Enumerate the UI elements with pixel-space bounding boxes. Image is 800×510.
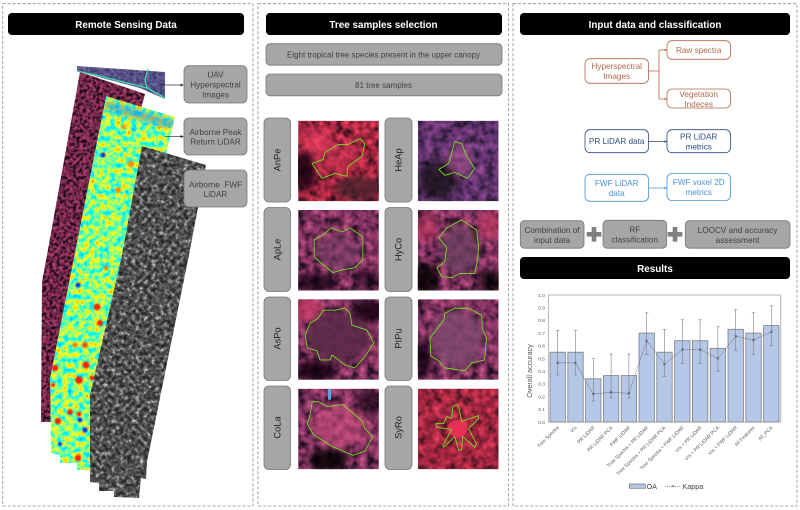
label: airborne peak return LiDAR: Return LiDAR — [190, 138, 241, 147]
species PtPu: PtPu — [394, 328, 404, 349]
text box: eight species — [266, 44, 502, 65]
heading: results — [520, 257, 790, 279]
box: combination of input data — [520, 221, 584, 248]
image: airborne hyperspectral strip — [41, 72, 145, 422]
box: combination of input data: input data — [534, 236, 570, 245]
flow: hyperspectral: Hyperspectral — [591, 62, 642, 71]
species AnPe: AnPe — [272, 149, 282, 171]
flow: hyperspectral: Images — [603, 72, 630, 81]
panel: remote sensing data — [3, 4, 253, 506]
species AnPe — [264, 118, 382, 202]
image: UAV hyperspectral strip — [77, 66, 165, 99]
box: RF classification: RF — [629, 226, 640, 234]
y axis labels: 0.5 — [538, 356, 545, 362]
box: RF classification — [603, 220, 667, 248]
flow: FWF LiDAR: FWF voxel 2D — [673, 178, 725, 187]
label: airborne peak return LiDAR — [184, 118, 247, 155]
arrow: UAV — [164, 84, 184, 86]
species SyRo: SyRo — [394, 416, 404, 439]
y axis labels: 0.3 — [538, 382, 545, 388]
box: combination of input data: Combination of — [524, 226, 580, 235]
flow: hyperspectral — [585, 41, 730, 109]
flow: FWF LiDAR: metrics — [686, 188, 712, 197]
x axis labels: Tree Spectra — [536, 425, 561, 449]
box: RF classification: classification — [612, 236, 658, 244]
line: kappa — [556, 331, 772, 395]
flow: PR LiDAR: PR LiDAR — [680, 132, 717, 142]
error bars — [556, 306, 773, 401]
box: LOOCV and accuracy assessment: assessment — [716, 236, 760, 245]
species AsPo — [264, 297, 386, 382]
text box: 81 tree samples — [266, 74, 502, 96]
label: UAV hyperspectral images — [184, 66, 247, 103]
x axis labels: PR LiDAR — [576, 425, 597, 445]
label: UAV hyperspectral images: Images — [202, 90, 229, 99]
y axis labels: 0.0 — [538, 420, 545, 426]
x axis labels: All Features — [734, 425, 757, 448]
species PtPu — [385, 297, 498, 380]
flow: FWF LiDAR — [585, 174, 730, 201]
heading: input data and classification: Input data and classification — [589, 20, 721, 31]
heading: input data and classification — [520, 13, 790, 35]
legend: OA — [646, 482, 657, 491]
heading: tree samples selection — [266, 13, 502, 35]
species HyCo — [385, 208, 505, 295]
flow: hyperspectral: Vegetation — [679, 90, 718, 99]
legend — [629, 482, 703, 491]
species HyCo: HyCo — [394, 238, 404, 261]
species CoLa — [264, 386, 384, 472]
y axis labels: 0.2 — [538, 394, 545, 400]
x axis labels: VIs + PR LiDAR — [674, 425, 704, 454]
label: UAV hyperspectral images: Hyperspectral — [190, 80, 241, 90]
box: LOOCV and accuracy assessment — [685, 221, 790, 248]
x axis labels: Tree Spectra + FWF LiDAR — [639, 425, 686, 472]
flow: PR LiDAR: PR LiDAR data — [589, 137, 645, 146]
label: airborne FWF LiDAR: LiDAR — [204, 190, 227, 199]
x axis labels: All_PCA — [757, 425, 775, 442]
flow: hyperspectral: Raw spectra — [676, 46, 722, 55]
flow: PR LiDAR: metrics — [686, 142, 712, 152]
x axis labels: Tree Spectra + PR LiDAR PCA — [616, 425, 668, 477]
panel: input data and classification — [513, 4, 797, 506]
label: airborne FWF LiDAR — [184, 170, 247, 207]
species HeAp — [385, 118, 498, 202]
species SyRo — [385, 386, 498, 470]
text box: eight species: Eight tropical tree species present in the upper canopy — [287, 50, 480, 59]
bar chart: overall accuracy — [525, 293, 781, 491]
panel: tree samples selection — [258, 4, 508, 506]
species AsPo: AsPo — [272, 327, 282, 350]
flow: FWF LiDAR: data — [609, 189, 625, 198]
heading: results: Results — [637, 264, 673, 275]
image: peak return LiDAR strip — [50, 96, 175, 470]
text box: 81 tree samples: 81 tree samples — [355, 81, 412, 90]
x axis labels: PR LiDAR PCA — [586, 425, 615, 453]
box: LOOCV and accuracy assessment: LOOCV and accuracy — [698, 226, 778, 235]
species ApLe: ApLe — [272, 239, 282, 260]
y axis labels: 0.7 — [538, 331, 545, 337]
heading: remote sensing data — [8, 13, 244, 35]
image: full waveform LiDAR strip — [90, 146, 206, 498]
label: airborne peak return LiDAR: Airborne Peak — [190, 128, 242, 137]
bars: OA — [550, 326, 779, 422]
y axis title: Overall accuracy — [525, 344, 534, 398]
x axis labels: Tree Spectra + PR LiDAR — [606, 425, 650, 469]
y axis labels: 0.6 — [538, 344, 545, 350]
icon: plus — [668, 227, 682, 242]
y axis labels: 0.4 — [538, 369, 545, 375]
x axis labels: VIs + FWF LiDAR — [707, 425, 739, 457]
flow: FWF LiDAR: FWF LiDAR — [595, 179, 639, 188]
label: airborne FWF LiDAR: Airborne FWF — [189, 180, 242, 190]
x axis labels: VIs + PR LiDAR PCA — [684, 425, 721, 462]
y axis labels: 0.9 — [538, 306, 545, 312]
icon: plus — [587, 227, 601, 242]
y axis labels — [538, 293, 545, 426]
y axis labels: 0.8 — [538, 318, 545, 324]
legend: Kappa — [682, 482, 703, 491]
heading: tree samples selection: Tree samples selection — [329, 20, 438, 31]
x axis labels: FWF LiDAR — [609, 425, 632, 448]
label: UAV hyperspectral images: UAV — [207, 70, 224, 80]
heading: remote sensing data: Remote Sensing Data — [75, 20, 177, 31]
species HeAp: HeAp — [394, 148, 404, 172]
x axis labels — [536, 425, 775, 477]
species CoLa: CoLa — [272, 416, 282, 439]
flow: hyperspectral: Indeces — [684, 100, 713, 109]
y axis labels: 1.0 — [538, 293, 545, 299]
flow: PR LiDAR — [585, 130, 730, 153]
y axis labels: 0.1 — [538, 407, 545, 413]
species ApLe — [264, 208, 382, 292]
x axis labels: VIs — [569, 425, 579, 434]
arrow: peak return — [165, 135, 184, 138]
